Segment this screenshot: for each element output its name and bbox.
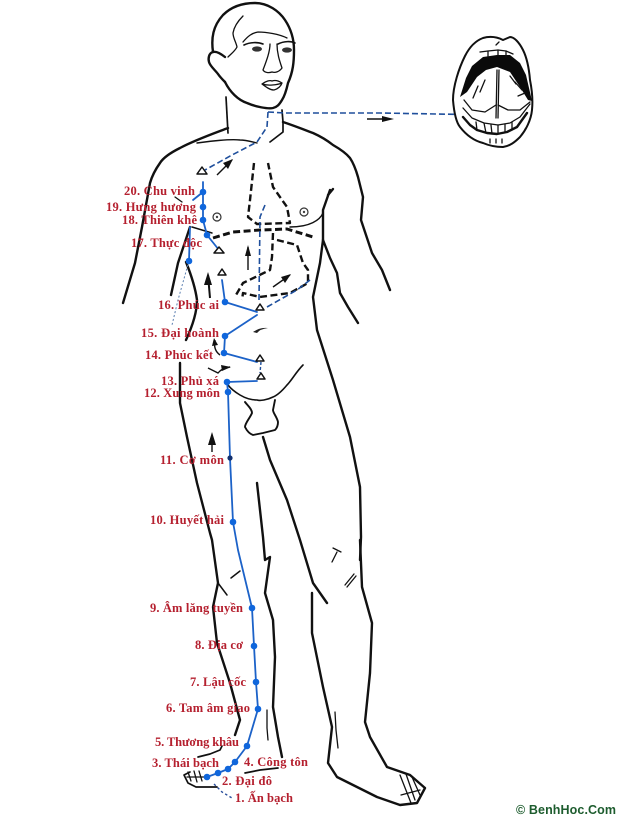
acupoint labels: 14. Phúc kết bbox=[145, 348, 214, 362]
acupoint labels bbox=[106, 184, 308, 805]
meridian line bbox=[189, 182, 261, 777]
arrows bbox=[204, 116, 394, 452]
right leg in image bbox=[263, 437, 425, 805]
acupoint labels: 13. Phủ xá bbox=[161, 374, 220, 388]
head bbox=[209, 3, 294, 108]
open mouth illustration bbox=[453, 37, 532, 147]
torso and arms bbox=[171, 189, 361, 560]
acupoint labels: 2. Đại đô bbox=[222, 774, 272, 788]
human figure outline bbox=[123, 3, 425, 805]
heart and esophagus bbox=[248, 163, 290, 224]
acupoint labels: 6. Tam âm giao bbox=[166, 701, 250, 715]
acupoint labels: 18. Thiên khê bbox=[122, 213, 197, 227]
triangle markers bbox=[197, 167, 265, 379]
stomach bbox=[236, 233, 273, 295]
neck and shoulders bbox=[123, 97, 390, 303]
black dashed organs bbox=[213, 163, 313, 300]
left leg in image bbox=[180, 363, 282, 787]
pelvis and groin bbox=[228, 365, 303, 435]
copyright credit: © BenhHoc.Com bbox=[516, 803, 616, 817]
acupoint labels: 9. Âm lăng tuyền bbox=[150, 601, 243, 615]
acupoint labels: 4. Công tôn bbox=[244, 755, 308, 769]
acupoint labels: 3. Thái bạch bbox=[152, 756, 219, 770]
acupoint labels: 16. Phúc ai bbox=[158, 298, 220, 312]
acupoint labels: 8. Địa cơ bbox=[195, 638, 243, 652]
acupoint labels: 12. Xung môn bbox=[144, 386, 220, 400]
acupoint labels: 7. Lậu cốc bbox=[190, 675, 246, 689]
blue dashed branches bbox=[172, 112, 493, 798]
diaphragm bbox=[213, 229, 313, 238]
acupoint labels: 11. Cơ môn bbox=[160, 453, 224, 467]
acupoint labels: 10. Huyết hải bbox=[150, 513, 225, 527]
acupoint labels: 17. Thực độc bbox=[131, 236, 202, 250]
acupoint labels: 15. Đại hoành bbox=[141, 326, 219, 340]
acupoint labels: 20. Chu vinh bbox=[124, 184, 195, 198]
face features bbox=[244, 42, 295, 90]
acupoint labels: 19. Hưng hương bbox=[106, 200, 197, 214]
acupoint dots bbox=[186, 189, 261, 780]
acupoint labels: 5. Thương khâu bbox=[155, 735, 239, 749]
acupoint labels: 1. Ấn bạch bbox=[235, 790, 293, 805]
